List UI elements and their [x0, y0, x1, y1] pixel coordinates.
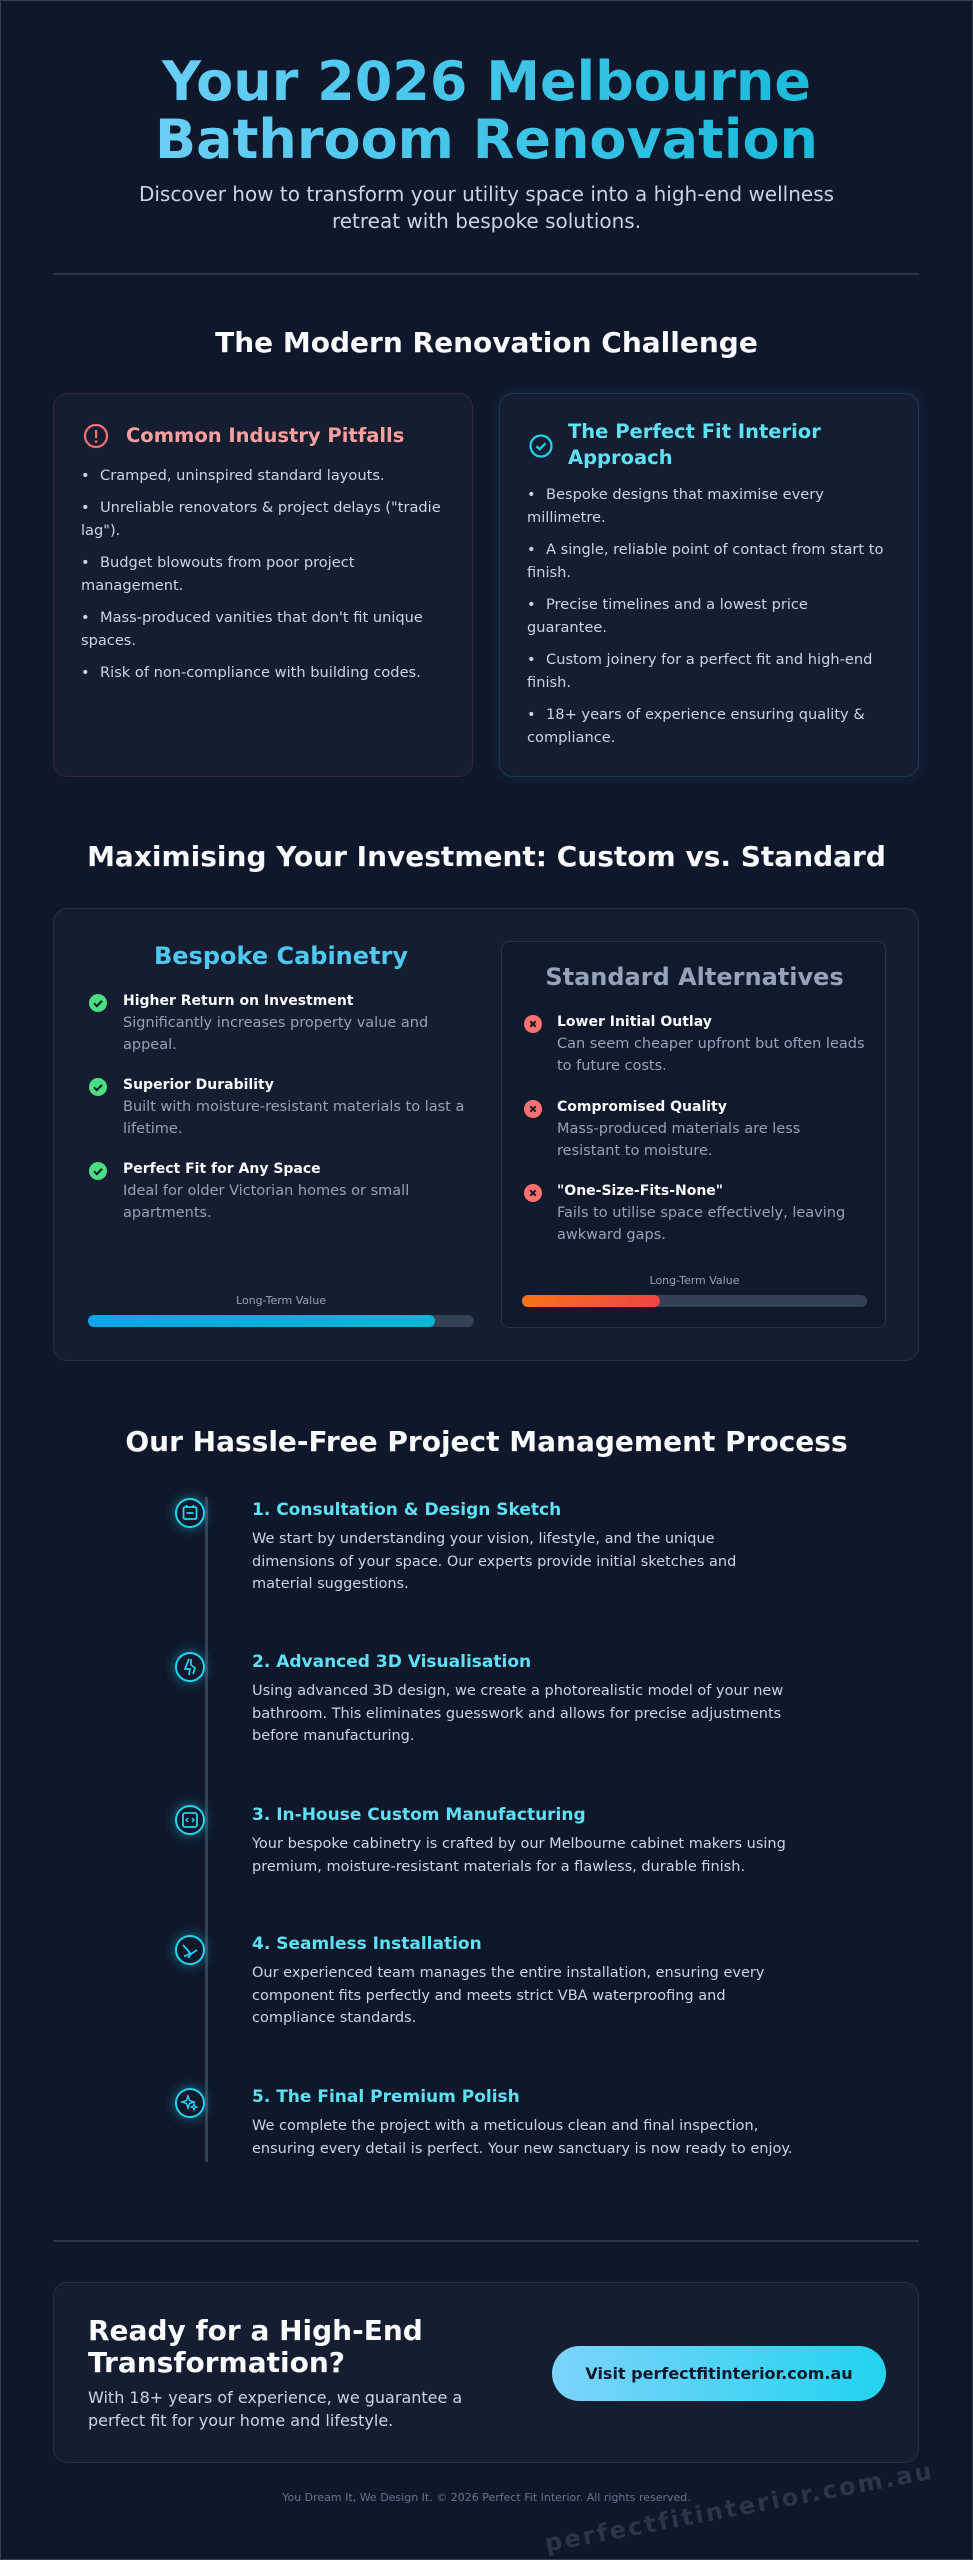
list: pitfalls: Cramped, uninspired standard layouts. [100, 467, 385, 484]
icon: step 4 [175, 1935, 205, 1965]
footer: You Dream It, We Design It. © 2026 Perfect Fit Interior. All rights reserved. [282, 2491, 691, 2504]
bar: bespoke long-term value [88, 1294, 474, 1327]
step 4 [252, 1934, 764, 2026]
list: pitfalls: • [81, 499, 90, 516]
item: perfect fit: Ideal for older Victorian homes or small apartments. [123, 1183, 409, 1221]
item: durability [89, 1077, 464, 1137]
heading: bespoke: Bespoke Cabinetry [154, 942, 408, 970]
step 2: 2. Advanced 3D Visualisation [252, 1652, 531, 1672]
icon: warning [84, 424, 108, 448]
step 1 [252, 1500, 736, 1592]
icon: step 1 calendar [175, 1498, 205, 1528]
title [0, 53, 973, 169]
panel: comparison [53, 908, 919, 1361]
list: approach: Precise timelines and a lowest price guarantee. [527, 596, 808, 636]
heading: process: Our Hassle-Free Project Management Process [125, 1425, 848, 1458]
heading: maximising investment: Maximising Your Investment: Custom vs. Standard [87, 840, 886, 873]
list: approach: • [527, 541, 536, 558]
item: compromised quality: Compromised Quality [557, 1099, 727, 1115]
heading: modern renovation challenge: The Modern Renovation Challenge [215, 326, 758, 359]
item: perfect fit [89, 1161, 409, 1221]
watermark: perfectfitinterior.com.au [542, 2457, 936, 2558]
step 4: 4. Seamless Installation [252, 1934, 482, 1954]
panel: call to action [53, 2282, 919, 2463]
panel: perfect fit approach [499, 393, 919, 777]
button: Visit perfectfitinterior.com.au [585, 2364, 853, 2383]
list: pitfalls: • [81, 664, 90, 681]
list: pitfalls: Mass-produced vanities that don't fit unique spaces. [81, 609, 423, 649]
list: pitfalls: Budget blowouts from poor project management. [81, 554, 354, 594]
item: ROI [89, 993, 428, 1053]
icon: check [529, 434, 553, 458]
item: ROI: Significantly increases property value and appeal. [123, 1015, 428, 1053]
heading: standard: Standard Alternatives [545, 963, 844, 991]
item: one size fits none [524, 1183, 845, 1243]
step 5: We complete the project with a meticulous clean and final inspection, ensuring every detail is perfect. Your new sanctuary is now ready to enjoy. [252, 2118, 792, 2157]
item: lower outlay: Can seem cheaper upfront but often leads to future costs. [557, 1036, 865, 1074]
timeline [168, 1491, 792, 2162]
list: approach: • [527, 706, 536, 723]
item: one size fits none: Fails to utilise space effectively, leaving awkward gaps. [557, 1205, 845, 1243]
step 3: Your bespoke cabinetry is crafted by our Melbourne cabinet makers using premium, moisture-resistant materials for a flawless, durable finish. [252, 1836, 786, 1875]
step 3: 3. In-House Custom Manufacturing [252, 1805, 586, 1825]
list: approach: • [527, 486, 536, 503]
list: approach: Bespoke designs that maximise every millimetre. [527, 486, 824, 526]
subtitle [139, 182, 834, 233]
heading: approach: The Perfect Fit Interior [568, 420, 821, 443]
list: approach: Custom joinery for a perfect fit and high-end finish. [527, 651, 872, 691]
heading: pitfalls: Common Industry Pitfalls [126, 424, 404, 447]
list: pitfalls [81, 467, 441, 681]
list: pitfalls: Risk of non-compliance with building codes. [100, 664, 421, 681]
step 1: We start by understanding your vision, lifestyle, and the unique dimensions of your space. Our experts provide initial sketches and material suggestions. [252, 1531, 736, 1592]
list: approach: 18+ years of experience ensuring quality & compliance. [527, 706, 865, 746]
item: durability: Built with moisture-resistant materials to last a lifetime. [123, 1099, 464, 1137]
icon: step 5 sparkles [175, 2088, 205, 2118]
column: bespoke cabinetry [88, 942, 474, 1327]
step 5 [252, 2087, 792, 2157]
subtitle: retreat with bespoke solutions. [332, 209, 641, 233]
item: perfect fit: Perfect Fit for Any Space [123, 1161, 321, 1177]
item: ROI: Higher Return on Investment [123, 993, 353, 1009]
subtitle: Discover how to transform your utility space into a high-end wellness [139, 182, 834, 206]
item: lower outlay: Lower Initial Outlay [557, 1014, 712, 1030]
icon: step 3 [175, 1805, 205, 1835]
list: pitfalls: Unreliable renovators & project delays ("tradie lag"). [81, 499, 441, 539]
heading: approach: Approach [568, 446, 673, 469]
step 1: 1. Consultation & Design Sketch [252, 1500, 561, 1520]
column: standard alternatives [501, 941, 886, 1328]
item: compromised quality: Mass-produced materials are less resistant to moisture. [557, 1121, 800, 1159]
list: approach: • [527, 596, 536, 613]
list: approach: A single, reliable point of contact from start to finish. [527, 541, 883, 581]
panel: common industry pitfalls [53, 393, 473, 777]
step 4: Our experienced team manages the entire installation, ensuring every component fits perfectly and meets strict VBA waterproofing and compliance standards. [252, 1965, 764, 2026]
bar: bespoke long-term value: Long-Term Value [236, 1294, 326, 1307]
cta text: With 18+ years of experience, we guarantee a perfect fit for your home and lifestyle. [88, 2388, 462, 2430]
bar: standard long-term value [522, 1274, 867, 1307]
step 3 [252, 1805, 786, 1875]
list: pitfalls: • [81, 554, 90, 571]
list: pitfalls: • [81, 467, 90, 484]
step 2 [252, 1652, 783, 1744]
item: durability: Superior Durability [123, 1077, 274, 1093]
heading: approach [568, 420, 821, 469]
item: lower outlay [524, 1014, 865, 1074]
list: approach [527, 486, 883, 746]
step 5: 5. The Final Premium Polish [252, 2087, 520, 2107]
bar: standard long-term value: Long-Term Value [650, 1274, 739, 1287]
button [552, 2346, 886, 2401]
icon: step 2 [175, 1652, 205, 1682]
title: Bathroom Renovation [155, 108, 818, 171]
list: pitfalls: • [81, 609, 90, 626]
item: compromised quality [524, 1099, 800, 1159]
list: approach: • [527, 651, 536, 668]
step 2: Using advanced 3D design, we create a photorealistic model of your new bathroom. This eliminates guesswork and allows for precise adjustments before manufacturing. [252, 1683, 783, 1744]
item: one size fits none: "One-Size-Fits-None" [557, 1183, 723, 1199]
cta heading: Ready for a High-End Transformation? [88, 2314, 423, 2379]
title: Your 2026 Melbourne [162, 50, 811, 113]
